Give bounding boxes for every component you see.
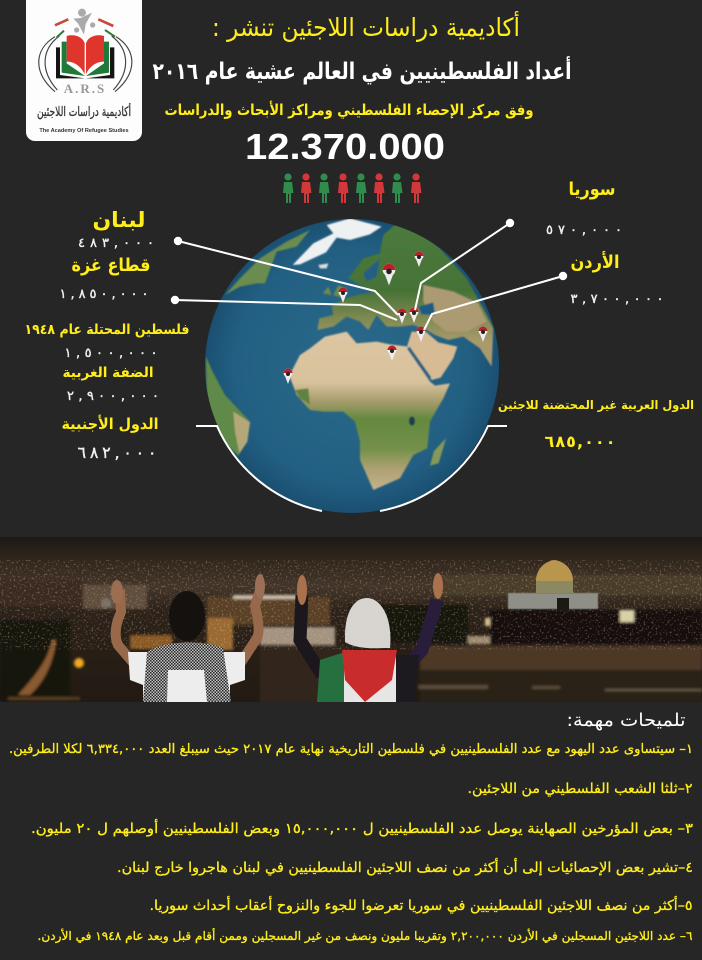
note 5: ٥–أكثر من نصف اللاجئين الفلسطينيين في سوريا تعرضوا للجوء والنزوح أعقاب أحداث سوريا.: [150, 896, 692, 914]
label: syria: سوريا: [568, 179, 616, 200]
label: syria: [546, 179, 622, 238]
subtitle: source: وفق مركز الإحصاء الفلسطيني ومراكز الأبحاث والدراسات: [164, 101, 534, 119]
madagascar: [430, 438, 446, 466]
label: foreign countries: ٦٨٢,٠٠٠: [78, 443, 156, 462]
icon row: people pictograms: [283, 173, 422, 203]
note 6: ٦– عدد اللاجئين المسجلين في الأردن ٢,٢٠٠,٠٠٠ وتقريبا مليون ونصف من غير المسجلين وممن أقام قبل وبعد عام ١٩٤٨ في الأردن.: [38, 928, 692, 944]
label: lebanon: لبنان: [92, 208, 146, 232]
note 4: ٤–تشير بعض الإحصائيات إلى أن أكثر من نصف اللاجئين الفلسطينيين في لبنان هاجروا خارج لبنان.: [117, 858, 693, 876]
north america: [225, 230, 310, 295]
label: gaza: قطاع غزة: [72, 255, 150, 276]
label: palestine 1948: فلسطين المحتلة عام ١٩٤٨: [24, 322, 190, 338]
central asia drylands: [423, 285, 487, 332]
label: palestine 1948: ١,٥٠٠,٠٠٠: [64, 346, 158, 361]
eurasia: [317, 223, 493, 367]
logo letters: A.R.S: [64, 81, 106, 96]
baltic gap: [363, 258, 380, 282]
arrow: lebanon leader: [175, 238, 398, 315]
arc bracket under globe: [196, 426, 507, 511]
figure: woman with flag: [297, 573, 443, 702]
west africa green: [295, 388, 310, 405]
label: lebanon: [78, 208, 154, 251]
red sea line: [408, 348, 430, 378]
uk: [323, 285, 347, 298]
note 2: ٢–ثلثا الشعب الفلسطيني من اللاجئين.: [468, 781, 692, 797]
iceland: [318, 263, 328, 268]
label: foreign countries: الدول الأجنبية: [62, 415, 158, 433]
photo: jerusalem at night with two figures: [0, 537, 702, 702]
label: gaza: [60, 255, 150, 302]
notes heading: تلميحات مهمة:: [566, 710, 686, 731]
note 1: ١– سيتساوى عدد اليهود مع عدد الفلسطينيين في فلسطين التاريخية نهاية عام ٢٠١٧ حيث سيبلغ العدد ٦,٣٣٤,٠٠٠ لكلا الطرفين.: [9, 742, 693, 757]
africa: [289, 332, 450, 490]
label: west bank: ٢,٩٠٠,٠٠٠: [67, 389, 159, 404]
title: academy line: أكاديمية دراسات اللاجئين تنشر :: [212, 10, 520, 42]
city and walls: [0, 575, 702, 702]
label: lebanon: ٤٨٣,٠٠٠: [78, 236, 154, 251]
label: non-host arab countries: الدول العربية غير المحتضنة للاجئين: [498, 398, 694, 413]
label: non-host arab countries: ٦٨٥,٠٠٠: [544, 432, 616, 451]
locator pins: [284, 252, 488, 384]
label: jordan: الأردن: [570, 251, 620, 273]
logo: Academy of Refugee Studies: [26, 0, 142, 141]
black sea: [418, 302, 435, 315]
city light speckle: [0, 560, 702, 650]
note 3: ٣– بعض المؤرخين الصهاينة يوصل عدد الفلسطينيين ل ١٥,٠٠٠,٠٠٠ وبعض الفلسطينيين أوصلهم ل ٢٠ مليون.: [31, 819, 693, 837]
arrow: gaza leader: [172, 297, 397, 320]
label: foreign countries: [62, 415, 158, 462]
dark lake: [409, 416, 415, 426]
label: west bank: الضفة الغربية: [62, 365, 154, 381]
title: main heading: أعداد الفلسطينيين في العالم عشية عام ٢٠١٦: [152, 55, 572, 85]
dome of the rock: [508, 560, 598, 610]
label: jordan: ٣,٧٠٠,٠٠٠: [570, 292, 664, 307]
icon: laurel and book emblem: [39, 9, 132, 92]
south america: [206, 357, 250, 456]
arrow: jordan leader: [424, 273, 566, 330]
globe: [205, 218, 499, 513]
arabia: [407, 332, 457, 380]
logo arabic name: أكاديمية دراسات اللاجئين: [37, 103, 131, 120]
label: syria: ٥٧٠,٠٠٠: [546, 223, 622, 238]
notes list: [9, 742, 693, 944]
total number: 12.370.000: [245, 126, 445, 167]
label: palestine 1948: [24, 322, 190, 361]
arrow: syria leader: [415, 220, 513, 310]
label: non-host arab countries: [498, 398, 694, 451]
figure: man with keffiyeh: [111, 574, 265, 702]
logo english name: The Academy Of Refugee Studies: [39, 128, 129, 134]
label: west bank: [62, 365, 159, 404]
label: gaza: ١,٨٥٠,٠٠٠: [60, 287, 148, 302]
greenland and arctic: [293, 218, 382, 265]
label: jordan: [570, 251, 664, 307]
